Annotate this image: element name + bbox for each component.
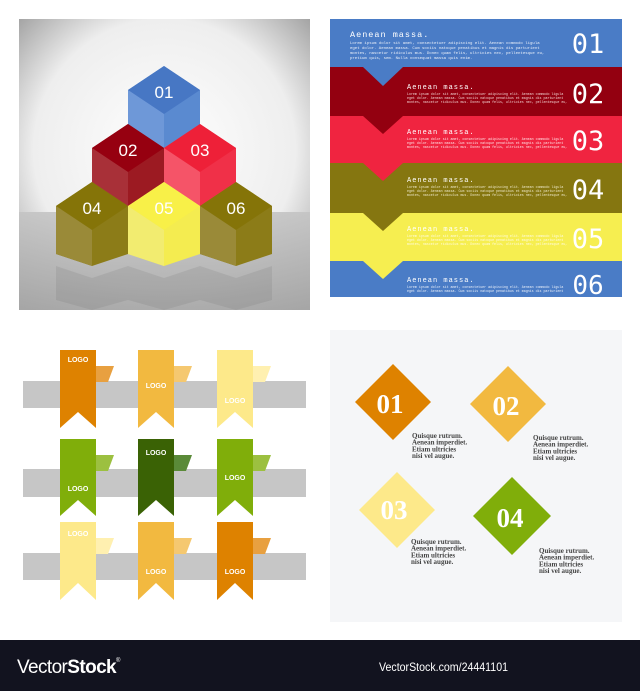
diamond 03: 03	[380, 495, 408, 525]
band 04	[330, 163, 622, 213]
cube 05	[128, 182, 200, 266]
panel: cube pyramid	[19, 19, 310, 310]
band 01	[330, 19, 622, 67]
band 02	[330, 67, 622, 116]
footer logo: ®	[116, 657, 121, 664]
band 05: Aenean massa.	[407, 226, 475, 234]
band 06: Lorem ipsum dolor sit amet, consectetuer adipiscing elit. Aenean commodo ligula	[407, 285, 563, 289]
band 06: eget dolor. Aenean massa. Cum sociis natoque penatibus et magnis dis parturient	[407, 289, 563, 293]
cube 06	[200, 182, 272, 266]
diamond 01: Aenean imperdiet.	[412, 439, 467, 447]
cube 01: 01	[155, 83, 173, 102]
ribbon r3c3: LOGO	[225, 569, 246, 576]
band 02: Lorem ipsum dolor sit amet, consectetuer adipiscing elit. Aenean commodo ligula	[407, 92, 563, 96]
ribbon r3c1: LOGO	[68, 531, 89, 538]
diamond 02: Aenean imperdiet.	[533, 441, 588, 449]
band 01: Lorem ipsum dolor sit amet, consectetuer adipiscing elit. Aenean commodo ligula	[350, 41, 540, 46]
band 04: montes, nascetur ridiculus mus. Donec quam felis, ultricies nec, pellentesque eu,	[407, 193, 567, 197]
ribbon r1c3	[217, 350, 271, 428]
cube reflections	[56, 266, 272, 310]
band 03	[330, 116, 622, 163]
cube 04	[56, 182, 128, 266]
band 06	[330, 261, 622, 301]
diamond 01: Etiam ultricies	[412, 445, 456, 453]
diamond 01: Quisque rutrum.	[412, 432, 463, 440]
diamond 04: 04	[496, 503, 524, 533]
ribbon r3c2: LOGO	[146, 569, 167, 576]
diamond 02: 02	[492, 391, 520, 421]
band 03: Lorem ipsum dolor sit amet, consectetuer adipiscing elit. Aenean commodo ligula	[407, 137, 563, 141]
panel: diamonds	[330, 330, 622, 622]
band 01: Aenean massa.	[350, 30, 429, 40]
cube 01	[128, 66, 200, 150]
band 01: pretium quis, sem. Nulla consequat massa quis enim.	[350, 56, 472, 61]
band 03: Aenean massa.	[407, 129, 475, 137]
diamond 03: nisi vel augue.	[411, 558, 453, 566]
diamond 04	[473, 477, 594, 575]
ribbon r2c1: LOGO	[68, 486, 89, 493]
diamond 02: nisi vel augue.	[533, 454, 575, 462]
diamond 04: Aenean imperdiet.	[539, 554, 594, 562]
ribbon r2c2	[138, 439, 192, 516]
footer logo: VectorStock	[17, 657, 116, 678]
cube 06: 06	[227, 199, 245, 218]
footer bar	[0, 640, 640, 691]
diamond 03	[359, 472, 466, 566]
cube 05: 05	[155, 199, 173, 218]
cube 03	[164, 124, 236, 208]
band 05: 05	[572, 224, 604, 255]
footer url: VectorStock.com/24441101	[379, 660, 508, 674]
band 02: eget dolor. Aenean massa. Cum sociis natoque penatibus et magnis dis parturient	[407, 96, 563, 100]
diamond 01: nisi vel augue.	[412, 452, 454, 460]
band 02: 02	[572, 79, 604, 110]
cube 02	[92, 124, 164, 208]
ribbon r1c1: LOGO	[68, 357, 89, 364]
ribbon r3c2	[138, 522, 192, 600]
band 01: montes, nascetur ridiculus mus. Donec quam felis, ultricies nec, pellentesque eu,	[350, 51, 544, 56]
band 04: Aenean massa.	[407, 177, 475, 185]
cube 02: 02	[119, 141, 137, 160]
band 02: Aenean massa.	[407, 84, 475, 92]
ribbon r2c3: LOGO	[225, 475, 246, 482]
ribbon r3c1	[60, 522, 114, 600]
diamond 04: Quisque rutrum.	[539, 547, 590, 555]
diamond 04: nisi vel augue.	[539, 567, 581, 575]
band 05	[330, 213, 622, 261]
diamond 01: 01	[376, 389, 404, 419]
diamond 03: Aenean imperdiet.	[411, 545, 466, 553]
band 06: Aenean massa.	[407, 277, 475, 285]
band 03: montes, nascetur ridiculus mus. Donec quam felis, ultricies nec, pellentesque eu,	[407, 145, 567, 149]
ribbon r2c3	[217, 439, 271, 516]
band 05: montes, nascetur ridiculus mus. Donec quam felis, ultricies nec, pellentesque eu,	[407, 242, 567, 246]
ribbon r1c2: LOGO	[146, 383, 167, 390]
panel: ribbons	[23, 350, 306, 600]
diamond 02: Quisque rutrum.	[533, 434, 584, 442]
band 01: 01	[572, 29, 604, 60]
band 05: eget dolor. Aenean massa. Cum sociis natoque penatibus et magnis dis parturient	[407, 238, 563, 242]
band 05: Lorem ipsum dolor sit amet, consectetuer adipiscing elit. Aenean commodo ligula	[407, 234, 563, 238]
ribbon r3c3	[217, 522, 271, 600]
diamond 02	[470, 366, 588, 462]
cube 04: 04	[83, 199, 101, 218]
ribbon r2c1	[60, 439, 114, 516]
ribbon r1c2	[138, 350, 192, 428]
band 03: eget dolor. Aenean massa. Cum sociis natoque penatibus et magnis dis parturient	[407, 141, 563, 145]
diamond 03: Etiam ultricies	[411, 551, 455, 559]
band 04: Lorem ipsum dolor sit amet, consectetuer adipiscing elit. Aenean commodo ligula	[407, 185, 563, 189]
diamond 04: Etiam ultricies	[539, 560, 583, 568]
ribbon r1c3: LOGO	[225, 398, 246, 405]
ribbon r2c2: LOGO	[146, 450, 167, 457]
panel: numbered bands	[330, 19, 622, 301]
band 06: 06	[572, 271, 604, 301]
ribbon r1c1	[60, 350, 114, 428]
diamond 02: Etiam ultricies	[533, 447, 577, 455]
diamond 01	[355, 364, 467, 460]
band 01: eget dolor. Aenean massa. Cum sociis natoque penatibus et magnis dis parturient	[350, 46, 540, 51]
band 02: montes, nascetur ridiculus mus. Donec quam felis, ultricies nec, pellentesque eu,	[407, 100, 567, 104]
band 04: 04	[572, 175, 604, 206]
diamond 03: Quisque rutrum.	[411, 538, 462, 546]
band 03: 03	[572, 126, 604, 157]
cube 03: 03	[191, 141, 209, 160]
band 04: eget dolor. Aenean massa. Cum sociis natoque penatibus et magnis dis parturient	[407, 189, 563, 193]
gray bars	[23, 381, 306, 580]
